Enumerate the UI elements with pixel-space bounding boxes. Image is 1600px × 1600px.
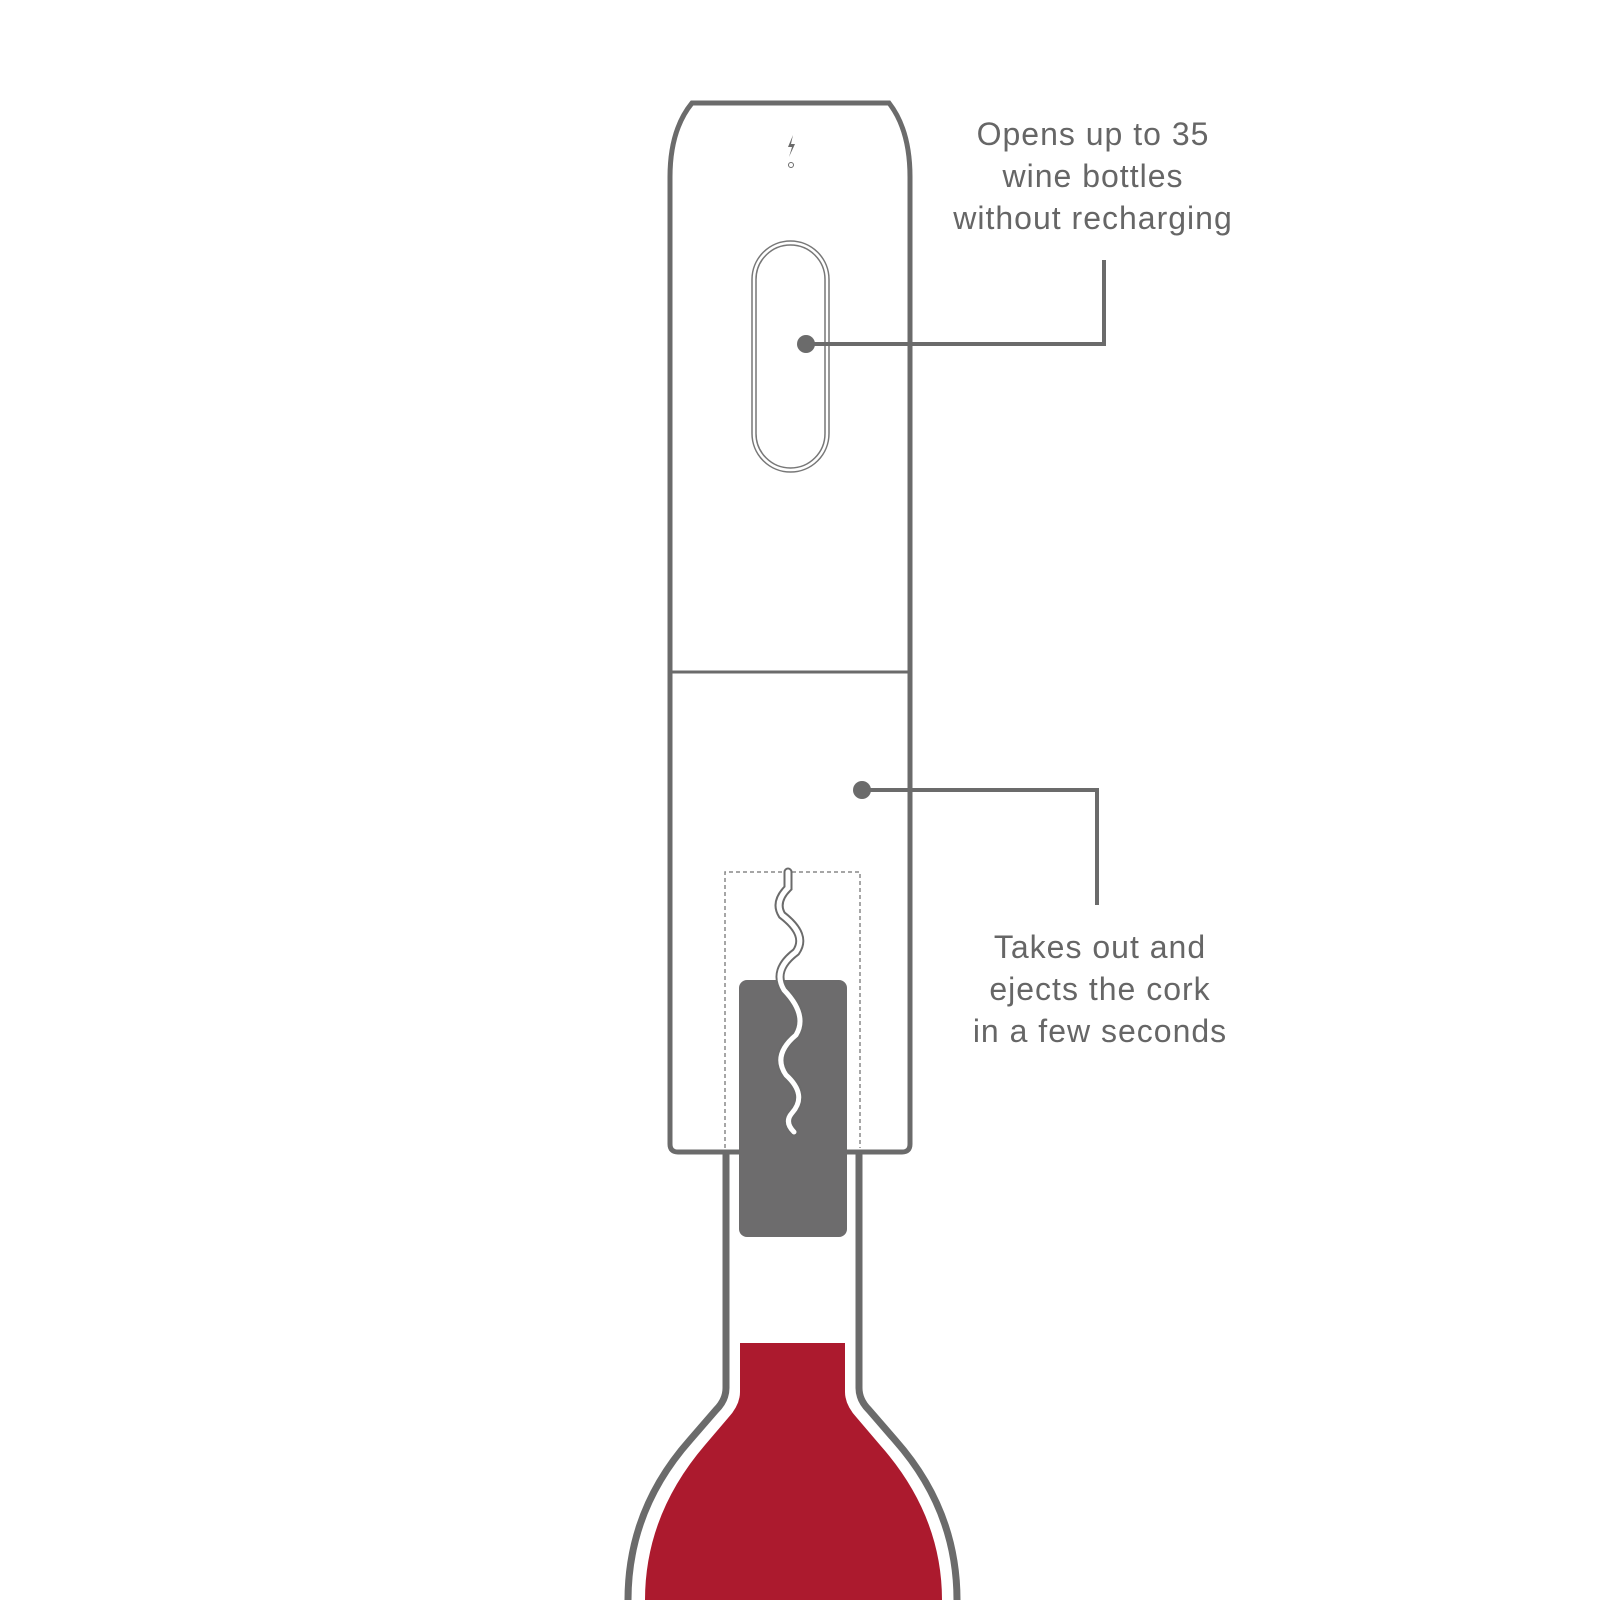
- text: battery callout: wine bottles: [1002, 158, 1183, 194]
- callout line 1: [797, 260, 1104, 353]
- bottle: [628, 1152, 957, 1600]
- text: battery callout: [953, 116, 1233, 236]
- cork: [739, 980, 847, 1237]
- text: cork callout: [973, 929, 1227, 1049]
- dashed box: [725, 872, 860, 1148]
- callout line 2: [853, 781, 1097, 905]
- text: battery callout: Opens up to 35: [977, 116, 1209, 152]
- text: cork callout: in a few seconds: [973, 1013, 1227, 1049]
- text: battery callout: without recharging: [953, 200, 1233, 236]
- device body: [670, 103, 910, 1152]
- button: [752, 241, 829, 472]
- text: cork callout: ejects the cork: [989, 971, 1211, 1007]
- corkscrew: [779, 872, 800, 1132]
- text: cork callout: Takes out and: [994, 929, 1206, 965]
- icon: charge indicator: [788, 135, 795, 168]
- wine: [645, 1343, 942, 1600]
